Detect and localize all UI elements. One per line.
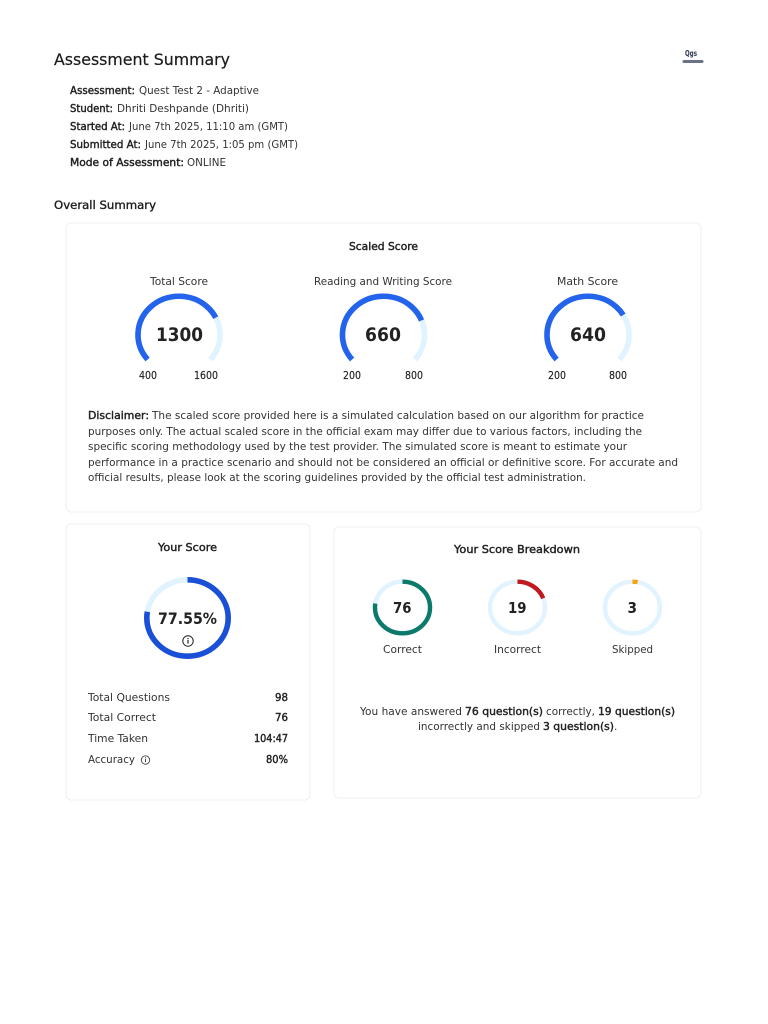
panel: scaled score [66,223,701,512]
gauge: math score: Math Score [557,276,618,288]
ring: skipped [605,582,660,656]
submitted at: June 7th 2025, 1:05 pm (GMT) [144,139,298,151]
row: time taken [87,733,288,745]
breakdown sentence: You have answered [359,706,462,718]
row: total questions: Total Questions [87,692,170,704]
row: total questions: 98 [275,692,288,704]
gauge: math score: 800 [609,370,627,382]
row: accuracy: Accuracy [88,754,135,766]
breakdown sentence: 3 question(s) [543,721,614,733]
gauge: total score: 1300 [156,324,203,346]
donut: 77.55%: 77.55% [158,609,217,628]
icon: logo [682,49,704,63]
gauge: reading and writing score: 200 [343,370,361,382]
title: Assessment Summary [54,50,230,69]
heading: your score: Your Score [157,542,217,554]
breakdown sentence: correctly, [546,706,595,718]
row: total correct: 76 [275,712,288,724]
disclaimer text [88,410,678,484]
row: accuracy [88,754,288,766]
panel: your score [66,524,310,800]
gauge: total score [138,276,220,382]
disclaimer text: The scaled score provided here is a simulated calculation based on our algorithm for practice [151,410,644,422]
started at: June 7th 2025, 11:10 am (GMT) [128,121,288,133]
gauge: total score: 400 [139,370,157,382]
ring: incorrect: Incorrect [494,644,541,656]
row: total correct: Total Correct [87,712,156,724]
submitted at: Submitted At: [70,139,141,151]
disclaimer text: specific scoring methodology used by the test provider. The simulated score is meant to estimate your [88,441,628,453]
submitted at [70,139,298,151]
ring: correct [375,582,430,656]
row: time taken: 104:47 [254,733,288,745]
ring: incorrect: 19 [508,599,526,617]
icon: logo: Qgs [685,49,697,58]
ring: correct: 76 [393,599,412,617]
heading: your score breakdown: Your Score Breakdown [453,544,580,556]
gauge: math score: 640 [570,324,606,346]
assessment name [70,85,259,97]
panel: your score breakdown [334,527,701,798]
breakdown sentence: incorrectly and skipped [418,721,540,733]
started at: Started At: [70,121,125,133]
student: Dhriti Deshpande (Dhriti) [117,103,249,115]
gauge: reading and writing score: 660 [365,324,401,346]
student: Student: [70,103,113,115]
heading: scaled score: Scaled Score [349,241,418,253]
row: total questions [87,692,288,704]
breakdown sentence: 76 question(s) [465,706,543,718]
ring: correct: Correct [383,644,422,656]
disclaimer text: performance in a practice scenario and should not be considered an official or definitive score. For accurate and [88,457,678,469]
donut: 77.55% [147,580,228,656]
stats table [87,692,288,766]
gauge: math score: 200 [548,370,566,382]
assessment details [70,85,298,169]
row: accuracy: 80% [266,754,288,766]
disclaimer text: Disclaimer: [88,410,149,422]
breakdown sentence: . [614,721,617,733]
row: total correct [87,712,288,724]
gauge: reading and writing score [314,276,452,382]
gauge: reading and writing score: Reading and Writing Score [314,276,452,288]
breakdown sentence: 19 question(s) [598,706,675,718]
ring: incorrect [490,582,545,656]
assessment name: Assessment: [70,85,135,97]
disclaimer text: purposes only. The actual scaled score in the official exam may differ due to various factors, including the [88,426,642,438]
gauge: total score: 1600 [194,370,218,382]
ring: skipped: 3 [628,599,637,617]
mode of assessment: Mode of Assessment: [70,157,184,169]
gauge: math score [547,276,629,382]
mode of assessment: ONLINE [187,157,226,169]
ring: skipped: Skipped [612,644,653,656]
gauge: reading and writing score: 800 [405,370,423,382]
disclaimer text: official results, please look at the scoring guidelines provided by the official test administration. [88,472,586,484]
breakdown sentence [359,706,675,733]
row: time taken: Time Taken [87,733,148,745]
icon: info [183,636,193,646]
heading: overall summary: Overall Summary [54,198,156,212]
assessment name: Quest Test 2 - Adaptive [139,85,259,97]
gauge: total score: Total Score [149,276,208,288]
